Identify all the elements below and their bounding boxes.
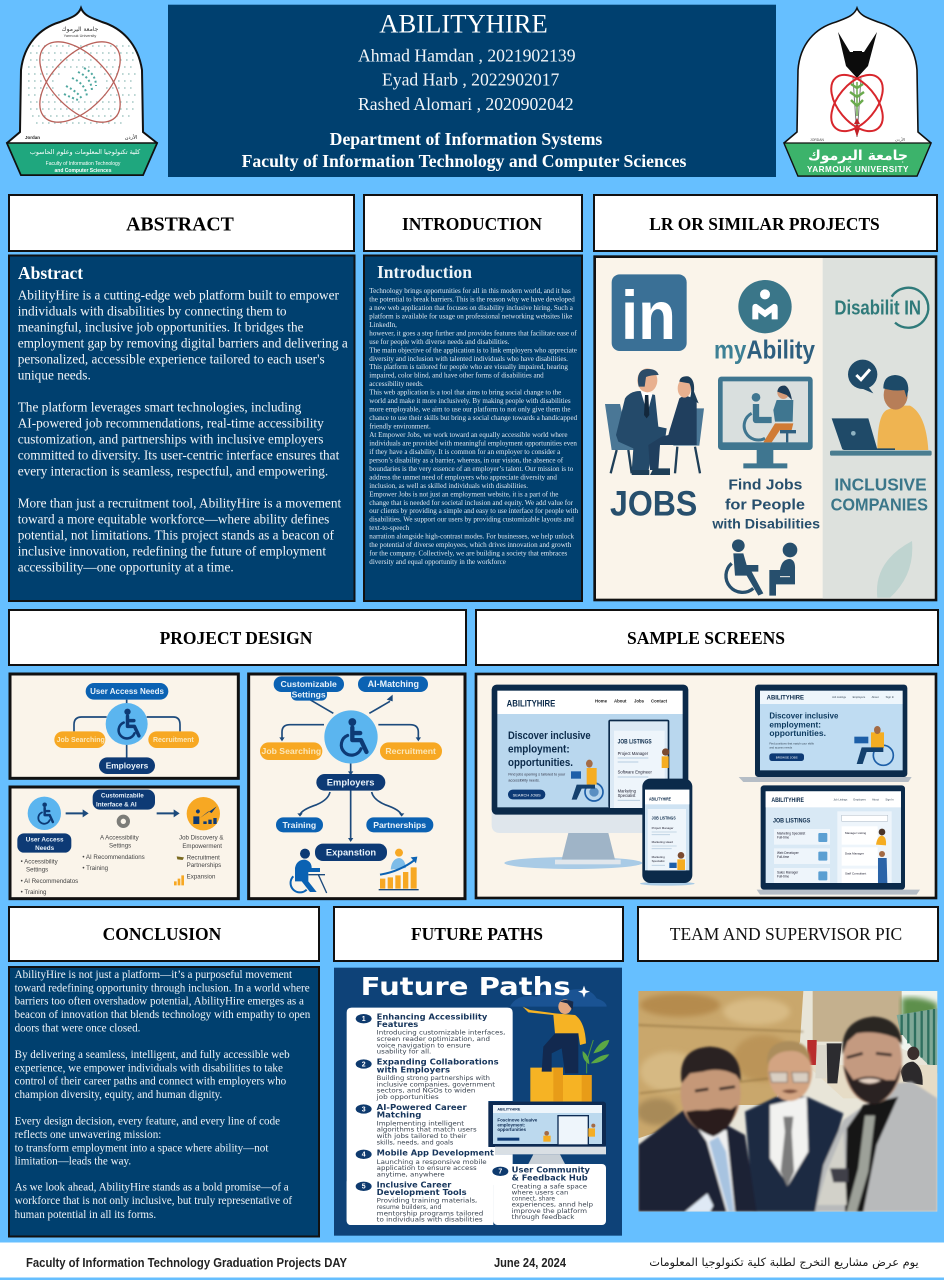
list card: skills, needs, and goals <box>377 1139 453 1146</box>
heading: sample screens: SAMPLE SCREENS <box>627 628 785 648</box>
screen: desktop mockup: accessibility needs. <box>508 779 540 783</box>
screen: desktop mockup: Software Engineer <box>618 770 652 775</box>
diagram: accessibility pipeline: • AI Recommendatos <box>21 878 78 885</box>
photo: team and supervisor <box>637 991 937 1212</box>
header panel <box>168 5 776 177</box>
diagram: accessibility pipeline: • AI Recommendations <box>82 854 145 861</box>
abstract body: More than just a recruitment tool, AbilityHire is a movement <box>18 495 341 510</box>
department <box>242 129 687 171</box>
team names: Ahmad Hamdan , 2021902139 <box>358 46 576 66</box>
screen: desktop mockup: opportunities. <box>508 757 573 769</box>
illustration: monitor with wheelchair user <box>718 377 813 468</box>
screen: laptop job listings: JOB LISTINGS <box>773 818 810 824</box>
list card: Inclusive Career <box>377 1180 452 1189</box>
conclusion body: By delivering a seamless, intelligent, and fully accessible web <box>15 1049 290 1061</box>
footer bar <box>0 1242 944 1278</box>
footer: arabic event name: يوم عرض مشاريع التخرج لطلبة كلية تكنولوجيا المعلومات <box>649 1255 919 1270</box>
heading: future paths <box>334 907 623 961</box>
screen: laptop job listings: Sign In <box>885 798 894 802</box>
list card <box>347 1008 606 1225</box>
diagram: full system map: Customizable <box>281 679 337 689</box>
left man <box>638 1047 757 1212</box>
screen: desktop mockup: Home <box>595 699 608 704</box>
introduction body: narration alongside high-contrast modes. For businesses, we help unlock <box>369 533 574 541</box>
screen: desktop mockup: ABILITYHIRE <box>507 698 555 708</box>
conclusion body: As we look ahead, AbilityHire stands as a bold promise—of a <box>15 1182 289 1194</box>
icon: disabilit in: Disabilit IN <box>834 297 921 319</box>
screen: laptop job listings: Sales Manager <box>777 870 798 874</box>
footer: event name: Faculty of Information Technology Graduation Projects DAY <box>26 1255 347 1270</box>
introduction body: a new web application that focuses on disability inclusive hiring. Such a <box>369 304 574 312</box>
introduction body: LinkedIn, <box>369 321 397 329</box>
list card: sectors, and NGOs to widen <box>377 1088 476 1095</box>
abstract body: potential, not limitations. This project stands as a beacon of <box>18 527 335 542</box>
screen: desktop mockup <box>492 685 688 869</box>
screen: laptop job listings: Manager Listing <box>845 831 867 835</box>
introduction body: more employable, we aim to use our platform to not only give them the <box>369 406 570 414</box>
conclusion body: barriers too often overshadow potential, AbilityHire emerges as a <box>15 996 304 1008</box>
introduction body: platform is available for usage on professional networking websites like <box>369 312 572 320</box>
abstract body: AI-powered job recommendations, real-time accessibility <box>18 415 324 430</box>
footer: date: June 24, 2024 <box>494 1255 567 1270</box>
list card: 4 <box>362 1152 366 1159</box>
screen: phone mockup: Project Manager <box>652 826 674 830</box>
introduction body: if they have a disability. It is common for an employer to consider a <box>369 448 561 456</box>
screen: laptop job listings: Job Listings <box>833 798 848 802</box>
screen: desktop mockup: Project Manager <box>618 751 649 756</box>
icon: growth bars <box>379 849 419 890</box>
diagram: accessibility pipeline: Interface & AI <box>96 801 137 808</box>
label: find jobs: with Disabilities <box>711 517 820 532</box>
diagram: accessibility pipeline: Customizabile <box>101 793 144 800</box>
panel: abstract <box>9 256 354 601</box>
abstract body: employment gap by removing digital barriers and delivering a <box>18 336 348 350</box>
diagram: accessibility pipeline: Needs <box>35 845 55 852</box>
list card: Matching <box>377 1111 421 1120</box>
future paths title: Future Paths <box>361 972 571 1001</box>
screen: desktop mockup: Marketing <box>618 788 637 793</box>
diagram: accessibility pipeline: • Training <box>82 865 109 872</box>
illustration: desktop mockup: ABILITYHIRE <box>497 1107 521 1111</box>
conclusion body: doors that were once closed. <box>15 1022 141 1034</box>
logo: faculty of information technology: الأردن <box>125 134 137 141</box>
list card: job opportunities <box>375 1094 439 1101</box>
conclusion body: beacon of innovation that blends technology with empathy to open <box>15 1009 311 1021</box>
conclusion body: limitation—leads the way. <box>15 1156 131 1168</box>
list card: 7 <box>498 1169 502 1176</box>
panel: conclusion <box>9 967 319 1236</box>
screen: phone mockup: ABILITYHIRE <box>649 797 671 802</box>
screen: desktop mockup: Contact <box>651 699 668 704</box>
abstract body: accessibility—one opportunity at a time. <box>18 559 234 574</box>
abstract body: AbilityHire is a cutting-edge web platform built to empower <box>18 288 340 302</box>
list card: 2 <box>362 1061 366 1068</box>
abstract body: personalized, accessible experience tailored to each user's <box>18 352 325 366</box>
introduction body: The main objective of the application is to link employers who appreciate <box>369 346 577 354</box>
introduction body: the potential to break barriers. This is the reason why we have developed <box>369 295 575 303</box>
diagram: full system map: Recruitment <box>385 746 436 756</box>
screen: phone mockup: Marketing <box>652 855 665 859</box>
decorative leaf <box>877 541 912 598</box>
abstract heading: Abstract <box>18 263 83 283</box>
label: inclusive companies: COMPANIES <box>831 495 928 515</box>
abstract body: committed to diversity. Its user-centric interface ensures that <box>18 447 340 462</box>
abstract body: inclusive innovation, redefining the future of employment <box>18 543 326 558</box>
screen: laptop landing page: ABILITYHIRE <box>767 694 804 701</box>
logo: yarmouk university: YARMOUK UNIVERSITY <box>807 165 909 174</box>
diagram: full system map: Partnerships <box>373 820 426 830</box>
conclusion body: workforce that is not only inclusive, but truly representative of <box>15 1195 292 1207</box>
list card: Introducing customizable interfaces, <box>377 1029 505 1036</box>
introduction body: the potential of diverse employees, which drives innovation and growth <box>369 541 572 549</box>
diagram: user access flow <box>10 674 238 778</box>
screen: laptop job listings: Full-time <box>777 855 789 859</box>
heading: sample screens <box>476 610 938 665</box>
diagram: accessibility pipeline: Settings <box>26 866 48 873</box>
list card: 1 <box>362 1016 366 1023</box>
list card: Expanding Collaborations <box>377 1058 499 1067</box>
diagram: full system map: Settings <box>292 689 326 699</box>
diagram: accessibility pipeline: Empowerment <box>182 843 222 850</box>
screen: laptop job listings: Data Manager <box>845 852 864 856</box>
screen: laptop landing page: Find positions that match your skills <box>769 741 815 745</box>
diagram: accessibility pipeline: User Access <box>26 836 64 843</box>
list card: Implementing intelligent <box>377 1120 465 1127</box>
heading: introduction: INTRODUCTION <box>402 214 542 234</box>
icon: myability <box>714 280 815 364</box>
diagram: user access flow: Job Searching <box>57 737 105 744</box>
screen: laptop landing page: Sign In <box>886 695 894 699</box>
list card: screen reader optimization, and <box>377 1036 490 1043</box>
illustration: person on laptop <box>830 360 932 456</box>
abstract body: meaningful, inclusive job opportunities. It bridges the <box>18 320 304 334</box>
label: find jobs <box>711 477 820 532</box>
screen: laptop landing page: Employers <box>853 695 866 699</box>
introduction body: address the unmet need of employers who appreciate diversity and <box>369 473 557 481</box>
title: ABILITYHIRE <box>379 8 548 38</box>
introduction body: use for people with diverse needs and disabilities. <box>369 338 510 346</box>
introduction body: boundaries is the very essence of an employer’s talent. Our mission is to <box>369 465 574 473</box>
middle man <box>745 1041 843 1212</box>
list card: 5 <box>362 1184 366 1191</box>
logo: faculty of information technology: جامعة اليرموك <box>62 26 99 33</box>
logo: yarmouk university <box>784 8 931 176</box>
heading: conclusion: CONCLUSION <box>103 924 222 944</box>
diagram: user access flow: User Access Needs <box>90 687 164 696</box>
screen: desktop mockup: Find jobs opening s tailored to your <box>508 773 566 777</box>
screen: phone mockup: Specialist <box>652 859 665 863</box>
introduction body: accessibility needs. <box>369 380 424 388</box>
introduction body: At Empower Jobs, we work toward an equally accessible world where <box>369 431 568 439</box>
conclusion body: human potential in all its forms. <box>15 1209 156 1221</box>
conclusion body: control of their career paths and connect with employers who <box>15 1076 287 1088</box>
screen: desktop mockup: About <box>614 699 627 704</box>
screen: laptop job listings: Marketing Specialist <box>777 832 805 836</box>
conclusion body: AbilityHire is not just a platform—it’s a purposeful movement <box>15 969 293 981</box>
heading: abstract: ABSTRACT <box>126 214 234 236</box>
conclusion body: experience, we empower individuals with disabilities to take <box>15 1062 283 1074</box>
conclusion body: champion diversity, equity, and human dignity. <box>15 1089 223 1101</box>
diagram: full system map: Employers <box>327 778 375 788</box>
introduction body: change that is needed for societal inclusion and equity. We add value for <box>369 499 574 507</box>
screen: desktop mockup: SEARCH JOBS <box>513 792 541 797</box>
list card: Features <box>377 1020 419 1029</box>
panel: sample screens <box>476 674 936 898</box>
illustration: desktop mockup: Foscinove icluaive <box>497 1118 538 1123</box>
diagram: user access flow: Recruitment <box>153 737 194 744</box>
diagram: accessibility pipeline: Job Discovery & <box>179 835 224 842</box>
list card: User Community <box>512 1166 590 1175</box>
diagram: full system map: Expanstion <box>326 848 376 858</box>
list card: AI-Powered Career <box>377 1103 467 1112</box>
list card: to individuals with disabilities <box>377 1217 483 1224</box>
introduction body: for the company. Collectively, we are building a society that embraces <box>369 550 567 558</box>
list card: Building strong partnerships with <box>377 1075 490 1082</box>
diagram: accessibility pipeline: Expansion <box>187 874 216 881</box>
diagram: full system map: Job Searching <box>262 746 321 756</box>
screen: desktop mockup: employment: <box>508 744 570 756</box>
diagram: full system map <box>249 674 465 899</box>
list card: Enhancing Accessibility <box>377 1012 487 1021</box>
logo: faculty of information technology: Faculty of Information Technology <box>46 161 121 167</box>
introduction body: Technology brings opportunities for all in this modern world, and it has <box>369 287 571 295</box>
label: inclusive companies <box>831 474 928 515</box>
abstract body: customization, and partnerships with inclusive employers <box>18 431 323 446</box>
introduction body: inclusion, as well as skilled individuals with disabilities. <box>369 482 528 490</box>
screen: laptop job listings <box>757 785 920 895</box>
screen: desktop mockup: Jobs <box>634 699 645 704</box>
introduction body: impaired, color blind, and have other forms of disabilities and <box>369 372 544 380</box>
label: jobs: JOBS <box>610 485 697 524</box>
introduction body: world and make it more inclusively. By making people with disabilities <box>369 397 571 405</box>
screen: laptop landing page: Discover inclusive <box>769 712 839 721</box>
screen: laptop landing page: employment: <box>769 720 821 729</box>
heading: conclusion <box>9 907 319 961</box>
diagram: accessibility pipeline: Recruitment <box>187 854 220 861</box>
introduction body: text-to-speech <box>369 524 410 532</box>
logo: yarmouk university: JORDAN <box>810 138 825 142</box>
illustration: desktop mockup <box>488 1102 606 1164</box>
logo: faculty of information technology: كلية تكنولوجيا المعلومات وعلوم الحاسوب <box>30 148 141 156</box>
list card: algorithms that match users <box>377 1127 477 1134</box>
list card: through feedback <box>512 1214 575 1221</box>
heading: future paths: FUTURE PATHS <box>411 924 543 944</box>
screen: desktop mockup: JOB LISTINGS <box>618 739 652 745</box>
diagram: accessibility pipeline: Settings <box>109 842 131 849</box>
list card: with Employers <box>377 1065 450 1074</box>
heading: project design <box>9 610 466 665</box>
introduction body: however, it goes a step further and provides features that facilitate ease of <box>369 329 577 337</box>
illustration: climbing figure <box>523 999 609 1102</box>
list card: 3 <box>362 1106 366 1113</box>
list card: inclusive companies, government <box>377 1081 496 1088</box>
list card: anytime, anywhere <box>377 1171 445 1178</box>
diagram: accessibility pipeline: A Accessibility <box>100 834 140 841</box>
list card: with jobs tailored to their <box>377 1133 467 1140</box>
list card: & Feedback Hub <box>512 1173 588 1182</box>
icon: person at desk <box>291 849 327 893</box>
abstract body: unique needs. <box>18 368 91 382</box>
list card: improve the platform <box>512 1208 587 1215</box>
list card: where users can <box>512 1189 569 1196</box>
screen: desktop mockup: Specialist <box>618 793 636 798</box>
screen: laptop landing page: opportunities. <box>769 729 826 738</box>
introduction body: Empower Jobs is not just an employment website, it is a part of the <box>369 490 558 498</box>
illustration: job interview <box>605 368 704 475</box>
screen: desktop mockup: Discover inclusive <box>508 730 591 742</box>
abstract body: individuals with disabilities by connecting them to <box>18 304 287 318</box>
abstract body: every interaction is seamless, respectful, and empowering. <box>18 463 328 478</box>
diagram: full system map: AI-Matching <box>368 679 419 689</box>
icon: myability: myAbility <box>714 334 815 364</box>
project design diagrams <box>10 674 465 899</box>
list card: mentorship programs tailored <box>377 1210 484 1217</box>
heading: introduction <box>364 195 582 251</box>
diagram: user access flow: Employers <box>106 761 149 771</box>
conclusion body: reflects one unwavering mission: <box>15 1129 161 1141</box>
right man <box>815 1017 937 1212</box>
diagram: full system map: Training <box>282 820 316 830</box>
list card: resume builders, and <box>377 1204 442 1211</box>
screen: phone mockup: Marketing Head <box>652 840 673 844</box>
logo: faculty of information technology: Yarmouk University <box>64 34 96 38</box>
screen: phone mockup: JOB LISTINGS <box>652 816 676 821</box>
screen: laptop job listings: Web Developer <box>777 851 799 855</box>
list card: experiences, annd help <box>512 1202 593 1209</box>
team names: Rashed Alomari , 2020902042 <box>358 94 574 114</box>
diagram: accessibility pipeline: Partnerships <box>187 862 221 869</box>
heading: project design: PROJECT DESIGN <box>160 628 313 648</box>
screen: laptop landing page: and access needs <box>769 745 793 749</box>
logo: faculty of information technology: and Computer Sciences <box>55 168 112 174</box>
screen: laptop job listings: Full-time <box>777 836 789 840</box>
diagram: accessibility pipeline: • Accessibility <box>21 859 59 866</box>
heading: lr or similar projects <box>594 195 937 251</box>
logo: faculty of information technology <box>7 8 157 175</box>
introduction body: our clients by providing a simple and easy to use interface for people with <box>369 507 579 515</box>
panel: similar projects collage <box>595 257 936 600</box>
logo: yarmouk university: الأردن <box>895 137 905 142</box>
illustration: desktop mockup: employment: <box>497 1122 526 1127</box>
screen: laptop job listings: ABILITYHIRE <box>771 797 804 804</box>
introduction body: diversity and equal opportunity in the workforce <box>369 558 506 566</box>
abstract body: The platform leverages smart technologies, including <box>18 399 302 414</box>
list card: Creating a safe space <box>512 1183 587 1190</box>
screen: phone mockup <box>640 779 695 886</box>
introduction heading: Introduction <box>377 262 472 282</box>
introduction body: This platform is tailored for people who are visually impaired, hearing <box>369 363 568 371</box>
introduction body: chance to use their skills but bring a social change towards a handicapped <box>369 414 578 422</box>
label: find jobs: for People <box>725 497 805 514</box>
heading: lr or similar projects: LR OR SIMILAR PROJECTS <box>649 214 880 234</box>
introduction body: individuals are provided with meaningful employment opportunities even <box>369 439 577 447</box>
list card: Development Tools <box>377 1188 467 1197</box>
heading: team and supervisor pic: TEAM AND SUPERVISOR PIC <box>670 924 902 944</box>
logo: yarmouk university: جامعة اليرموك <box>808 148 908 164</box>
diagram: accessibility pipeline: • Training <box>21 889 47 896</box>
label: inclusive companies: INCLUSIVE <box>834 474 927 494</box>
panel: future paths infographic <box>334 968 622 1236</box>
abstract body: toward a more equitable workforce—where ability defines <box>18 511 329 526</box>
diagram: accessibility pipeline <box>10 787 238 899</box>
heading: abstract <box>9 195 354 251</box>
conclusion body: Every design decision, every feature, and every line of code <box>15 1116 280 1128</box>
icon: disabilit in <box>834 288 928 328</box>
list card: application to ensure access <box>377 1165 477 1172</box>
panel: introduction <box>364 256 582 601</box>
label: find jobs: Find Jobs <box>728 477 802 494</box>
team names <box>358 46 576 114</box>
list card: connect, share <box>512 1196 555 1203</box>
conclusion body: to transform employment into a space where ability—not <box>15 1142 269 1154</box>
screen: laptop landing page: BROWSE JOBS <box>776 755 798 759</box>
conclusion body: toward redefining opportunity through inclusion. In a world where <box>15 982 310 994</box>
department: Faculty of Information Technology and Computer Sciences <box>242 151 687 171</box>
introduction body: This web application is a tool that aims to bring social change to the <box>369 389 561 397</box>
icon: linkedin: in <box>621 278 676 354</box>
list card: usability for all. <box>377 1049 431 1056</box>
logo: faculty of information technology: Jordan <box>25 135 40 140</box>
list card: Launching a responsive mobile <box>377 1159 487 1166</box>
icon: wheelchair and seated person <box>726 539 797 596</box>
screen: laptop landing page: About <box>872 695 879 699</box>
introduction body: diversity and inclusion with talented individuals who have disabilities. <box>369 355 568 363</box>
screen: laptop landing page <box>739 685 912 782</box>
team names: Eyad Harb , 2022902017 <box>382 70 560 90</box>
list card: Providing training materials, <box>377 1198 477 1205</box>
screen: laptop job listings: Employers <box>853 798 867 802</box>
list card: Mobile App Development <box>377 1148 494 1157</box>
department: Department of Information Systems <box>330 129 602 149</box>
introduction body: friendly environment. <box>369 423 431 431</box>
list card: voice navigation to ensure <box>377 1042 471 1049</box>
screen: laptop job listings: Full-time <box>777 874 789 878</box>
illustration: desktop mockup: opportunities <box>497 1127 526 1132</box>
screen: laptop job listings: About <box>872 798 879 802</box>
screen: laptop job listings: Staff Consultant <box>845 872 866 876</box>
introduction body: disabilities. We support our users by providing customizable layouts and <box>369 516 574 524</box>
introduction body: person’s disability as a barrier, whereas, in our vision, the absence of <box>369 456 564 464</box>
screen: laptop landing page: Job Listings <box>832 695 847 699</box>
heading: team and supervisor pic <box>638 907 938 961</box>
